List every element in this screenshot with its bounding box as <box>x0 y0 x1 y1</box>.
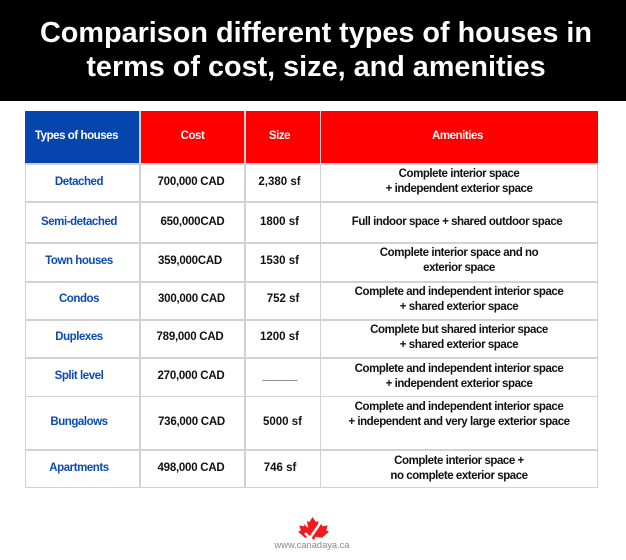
row: bungalows name: Bungalows <box>50 416 108 428</box>
header: types of houses <box>25 111 139 163</box>
row: duplexes name: Duplexes <box>55 331 103 343</box>
row: detached cost <box>141 165 244 201</box>
row: condos amenities: + shared exterior space <box>400 300 518 312</box>
row: split level name <box>26 359 139 396</box>
row: detached name: Detached <box>55 176 103 188</box>
row: duplexes cost <box>141 321 244 357</box>
row: town houses amenities: exterior space <box>423 262 495 274</box>
row: duplexes size: 1200 sf <box>260 331 299 343</box>
header: amenities <box>321 111 598 163</box>
website text: www.canadaya.ca <box>275 540 349 550</box>
row: town houses name: Town houses <box>45 254 113 266</box>
row: apartments amenities: no complete exterior space <box>390 470 528 482</box>
row: bungalows amenities: Complete and independent interior space <box>355 401 563 413</box>
row: condos cost <box>141 283 244 319</box>
row: bungalows size <box>246 397 320 449</box>
row: condos size: 752 sf <box>267 293 299 305</box>
row: semi-detached name: Semi-detached <box>41 216 117 228</box>
row: apartments cost: 498,000 CAD <box>158 462 224 474</box>
row: condos amenities: Complete and independent interior space <box>355 286 563 298</box>
row: town houses amenities <box>321 244 597 281</box>
row: bungalows amenities: + independent and very large exterior space <box>348 416 570 428</box>
row: town houses cost <box>141 244 244 281</box>
header: amenities: Amenities <box>432 130 483 142</box>
row: semi-detached cost <box>141 203 244 242</box>
row: semi-detached name <box>26 203 139 242</box>
row: split level cost <box>141 359 244 396</box>
row: detached amenities <box>321 165 597 201</box>
row: duplexes size <box>246 321 320 357</box>
row: split level amenities: + independent exterior space <box>386 378 532 390</box>
row: semi-detached size <box>246 203 320 242</box>
row: town houses amenities: Complete interior space and no <box>380 247 538 259</box>
row: bungalows cost <box>141 397 244 449</box>
row: duplexes cost: 789,000 CAD <box>157 331 223 343</box>
row: town houses cost: 359,000CAD <box>158 254 222 266</box>
row: apartments name <box>26 451 139 487</box>
row: condos size <box>246 283 320 319</box>
title banner <box>0 0 626 101</box>
row: semi-detached size: 1800 sf <box>260 216 299 228</box>
row: condos amenities <box>321 283 597 319</box>
row: duplexes amenities: Complete but shared interior space <box>370 324 548 336</box>
title banner: terms of cost, size, and amenities <box>86 51 546 83</box>
row: duplexes amenities: + shared exterior space <box>400 338 518 350</box>
row: town houses size <box>246 244 320 281</box>
row: condos name: Condos <box>59 293 99 305</box>
row: split level cost: 270,000 CAD <box>158 370 224 382</box>
header: size: Size <box>269 130 290 142</box>
row: town houses size: 1530 sf <box>260 254 299 266</box>
row: duplexes amenities <box>321 321 597 357</box>
header: types of houses: Types of houses <box>35 130 118 142</box>
row: detached amenities: Complete interior space <box>399 168 519 180</box>
row: town houses name <box>26 244 139 281</box>
row: apartments name: Apartments <box>49 462 109 474</box>
icon: maple leaf with check <box>298 517 329 540</box>
header: size <box>246 111 320 163</box>
row: detached name <box>26 165 139 201</box>
row: detached size <box>246 165 320 201</box>
row: bungalows cost: 736,000 CAD <box>158 416 225 428</box>
row: apartments cost <box>141 451 244 487</box>
row: split level size (no value) <box>246 359 320 396</box>
row: bungalows name <box>26 397 139 449</box>
row: apartments size <box>246 451 320 487</box>
row: apartments amenities: Complete interior space + <box>394 454 524 466</box>
row: apartments amenities <box>321 451 597 487</box>
row: split level amenities: Complete and independent interior space <box>355 363 563 375</box>
header: cost: Cost <box>181 130 204 142</box>
header: cost <box>141 111 244 163</box>
row: detached cost: 700,000 CAD <box>158 176 224 188</box>
comparison table <box>25 111 598 488</box>
row: bungalows size: 5000 sf <box>263 416 302 428</box>
row: duplexes name <box>26 321 139 357</box>
logo <box>274 517 350 550</box>
row: apartments size: 746 sf <box>264 462 296 474</box>
row: detached amenities: + independent exterior space <box>386 182 532 194</box>
title banner: Comparison different types of houses in <box>40 17 592 49</box>
row: split level amenities <box>321 359 597 396</box>
row: bungalows amenities <box>321 397 597 449</box>
row: semi-detached amenities: Full indoor space + shared outdoor space <box>352 216 562 228</box>
row: condos cost: 300,000 CAD <box>158 293 225 305</box>
row: split level size (no value): ______ <box>262 370 297 382</box>
row: semi-detached amenities <box>321 203 597 242</box>
row: condos name <box>26 283 139 319</box>
row: split level name: Split level <box>55 370 103 382</box>
row: detached size: 2,380 sf <box>258 176 301 188</box>
row: semi-detached cost: 650,000CAD <box>160 216 224 228</box>
